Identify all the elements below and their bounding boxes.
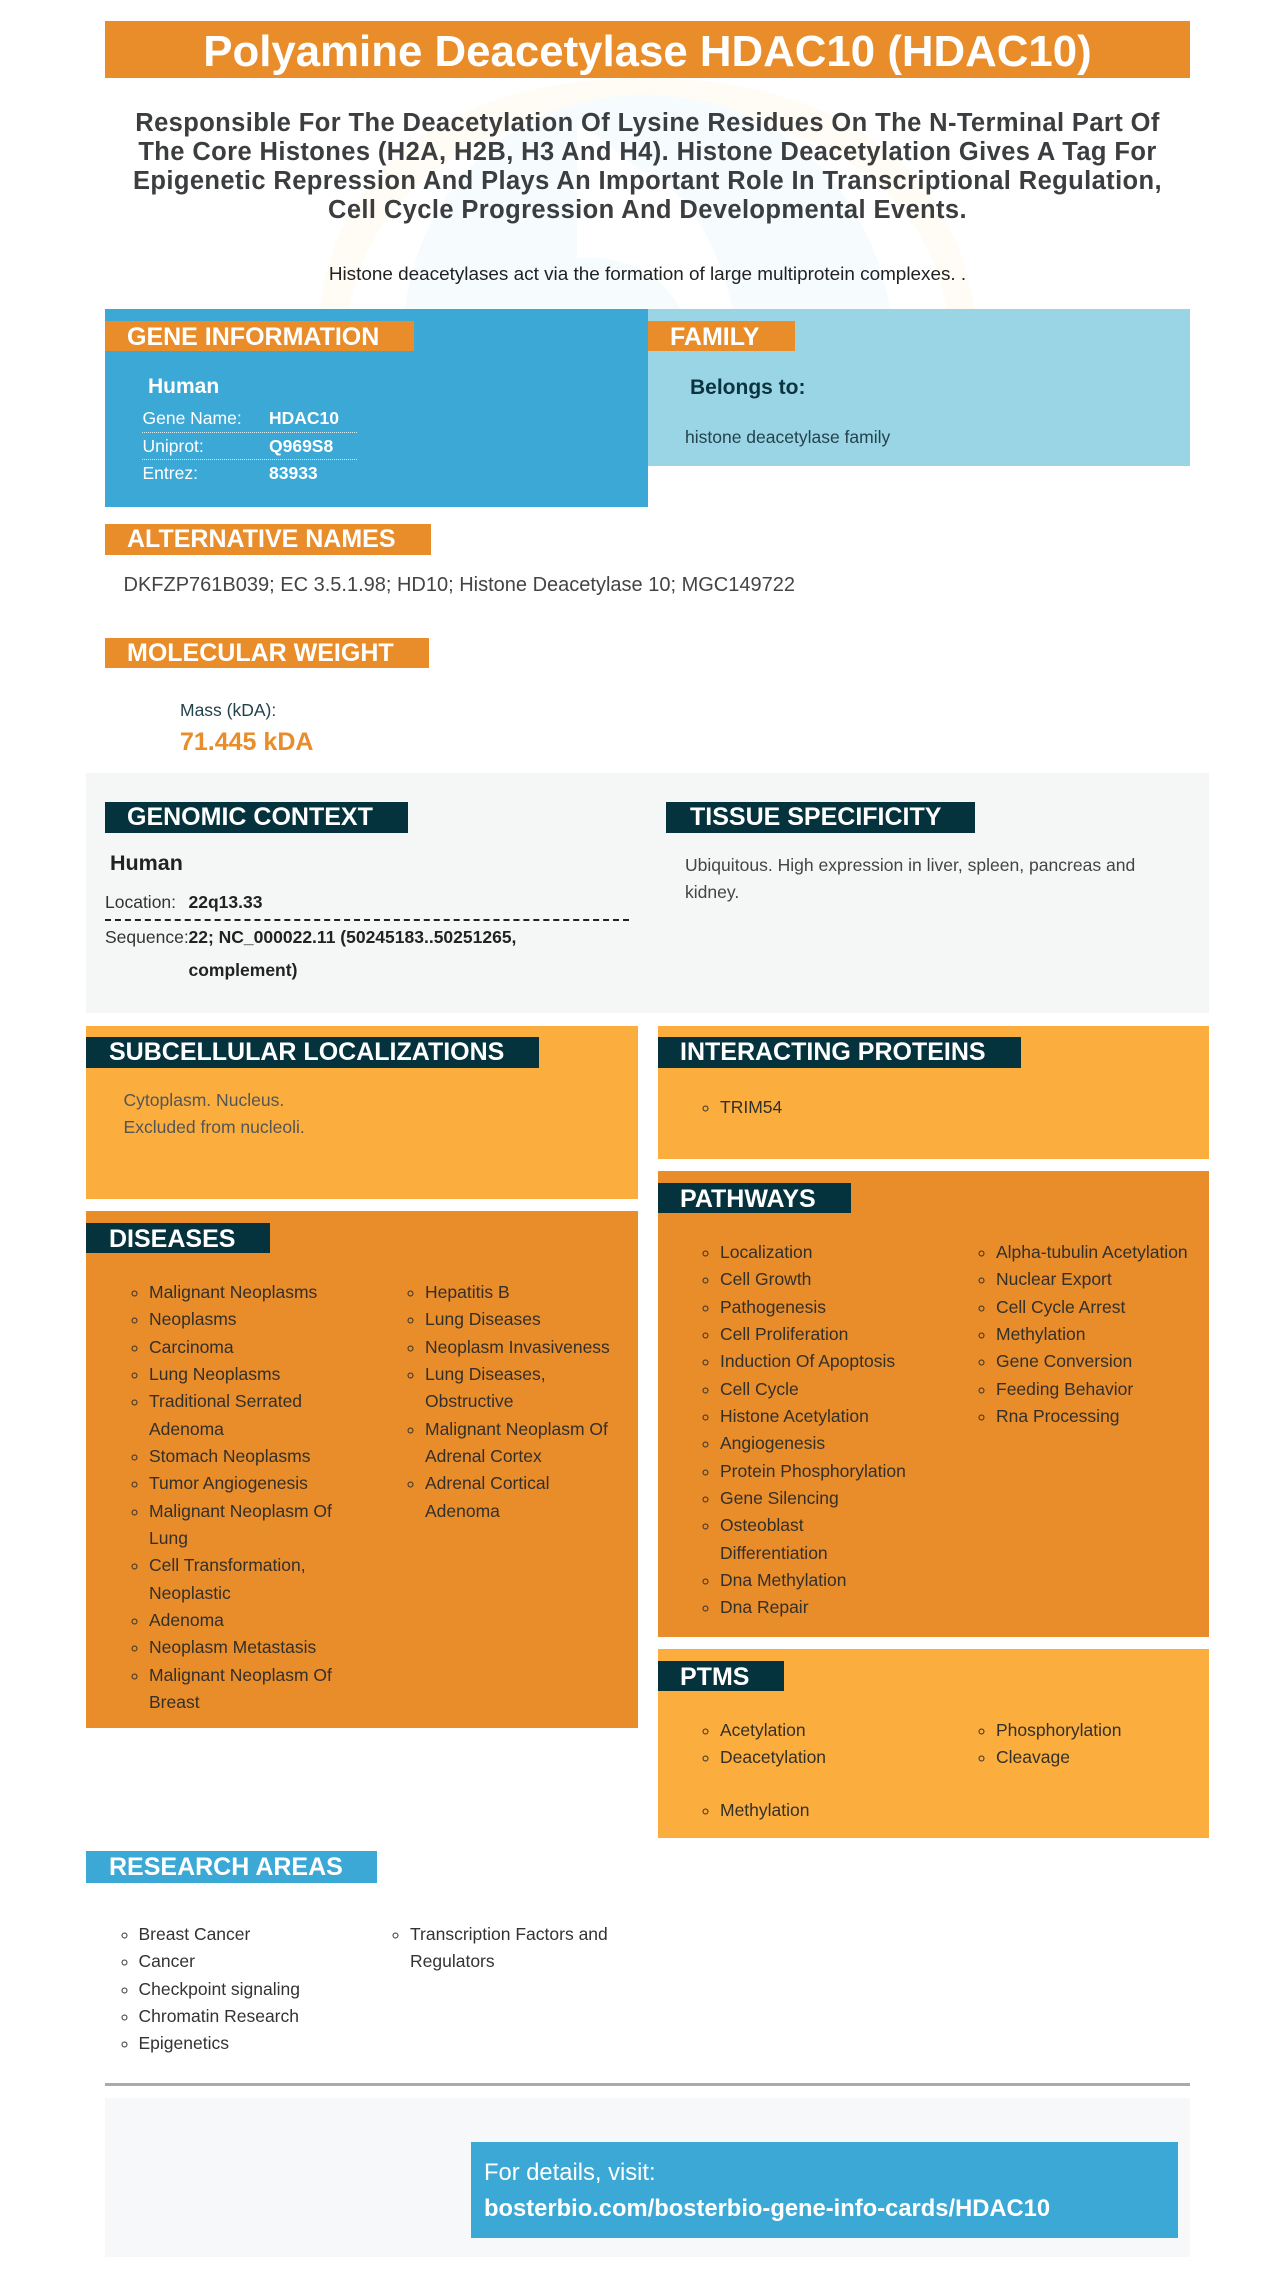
sequence value [188, 927, 516, 980]
pathway list column 1: Induction Of Apoptosis [720, 1351, 895, 1371]
heading: pathways: PATHWAYS [680, 1185, 816, 1213]
pathway list column 1: Angiogenesis [720, 1433, 825, 1453]
pathway list column 2: Feeding Behavior [996, 1379, 1133, 1399]
disease list column 2: Lung Diseases, Obstructive [425, 1364, 546, 1411]
heading: family: FAMILY [670, 323, 759, 351]
gene details table [142, 408, 357, 483]
pathway list column 1: Histone Acetylation [720, 1406, 869, 1426]
localization text [124, 1090, 305, 1137]
gene details table: 83933 [269, 463, 318, 483]
gene details table: HDAC10 [269, 408, 339, 428]
heading: pathways [658, 1183, 851, 1213]
location value: 22q13.33 [188, 892, 262, 912]
mass label: Mass (kDA): [180, 700, 276, 720]
research list column 1 [122, 1924, 300, 2053]
research list column 1: Cancer [138, 1951, 195, 1971]
disease list column 1: Cell Transformation, Neoplastic [149, 1555, 306, 1603]
disease list column 1: Carcinoma [149, 1337, 234, 1357]
belongs to label: Belongs to: [690, 376, 806, 399]
pathway list column 1: Cell Cycle [720, 1379, 799, 1399]
disease list column 2: Malignant Neoplasm Of Adrenal Cortex [425, 1419, 608, 1466]
ptm list column 1: Acetylation [720, 1720, 806, 1740]
pathway list column 1: Protein Phosphorylation [720, 1461, 906, 1481]
disease list column 2 [408, 1282, 610, 1521]
ptm list column 2 [978, 1720, 1122, 1767]
description heading [133, 109, 1162, 224]
disease list column 2: Adrenal Cortical Adenoma [425, 1473, 550, 1521]
panel: subcellular localizations [86, 1026, 638, 1199]
heading: alternative names: ALTERNATIVE NAMES [127, 525, 396, 553]
heading: interacting proteins: INTERACTING PROTEINS [680, 1038, 986, 1066]
pathway list column 1: Pathogenesis [720, 1297, 826, 1317]
pathway list column 1 [702, 1242, 906, 1617]
panel: interacting proteins [658, 1026, 1209, 1159]
heading: gene information: GENE INFORMATION [127, 323, 379, 351]
research list column 1: Epigenetics [138, 2033, 229, 2053]
background watermark [320, 78, 974, 309]
disease list column 1 [132, 1282, 332, 1712]
panel: diseases [86, 1211, 638, 1728]
protein list: TRIM54 [720, 1097, 782, 1117]
pathway list column 1: Dna Repair [720, 1597, 809, 1617]
disease list column 1: Traditional Serrated Adenoma [149, 1391, 302, 1439]
description heading: The Core Histones (H2A, H2B, H3 And H4). Histone Deacetylation Gives A Tag For [138, 138, 1157, 166]
callout: details link [471, 2142, 1178, 2238]
disease list column 1: Lung Neoplasms [149, 1364, 280, 1384]
family name: histone deacetylase family [685, 427, 890, 447]
pathway list column 2: Methylation [996, 1324, 1086, 1344]
details url: bosterbio.com/bosterbio-gene-info-cards/HDAC10 [484, 2195, 1050, 2222]
sequence value: 22; NC_000022.11 (50245183..50251265, [188, 927, 516, 947]
panel: footer [105, 2098, 1190, 2257]
ptm list column 1 [702, 1720, 826, 1820]
localization text: Excluded from nucleoli. [124, 1117, 305, 1137]
research list column 2: Transcription Factors and Regulators [410, 1924, 608, 1971]
disease list column 1: Neoplasm Metastasis [149, 1637, 316, 1657]
heading: research areas: RESEARCH AREAS [109, 1853, 343, 1881]
disease list column 1: Malignant Neoplasm Of Breast [149, 1665, 332, 1712]
panel: genomic context and tissue specificity [86, 773, 1209, 1013]
title banner: Polyamine Deacetylase HDAC10 (HDAC10) [203, 27, 1092, 76]
research list column 1: Checkpoint signaling [138, 1979, 300, 1999]
research list column 1: Chromatin Research [138, 2006, 299, 2026]
panel: family [648, 309, 1190, 466]
heading: subcellular localizations: SUBCELLULAR LOCALIZATIONS [109, 1038, 504, 1066]
alternative names text: DKFZP761B039; EC 3.5.1.98; HD10; Histone Deacetylase 10; MGC149722 [124, 574, 795, 596]
details label: For details, visit: [484, 2159, 656, 2186]
pathway list column 2: Gene Conversion [996, 1351, 1132, 1371]
heading: diseases: DISEASES [109, 1225, 235, 1253]
ptm list column 1: Methylation [720, 1800, 810, 1820]
heading: tissue specificity: TISSUE SPECIFICITY [690, 803, 941, 831]
pathway list column 1: Osteoblast Differentiation [720, 1515, 828, 1563]
pathway list column 2: Cell Cycle Arrest [996, 1297, 1125, 1317]
disease list column 1: Adenoma [149, 1610, 224, 1630]
species label: Human [110, 851, 183, 875]
localization text: Cytoplasm. Nucleus. [124, 1090, 284, 1110]
disease list column 1: Tumor Angiogenesis [149, 1473, 308, 1493]
pathway list column 2: Rna Processing [996, 1406, 1120, 1426]
species label: Human [148, 375, 219, 398]
pathway list column 1: Dna Methylation [720, 1570, 846, 1590]
heading: ptms: PTMS [680, 1663, 749, 1691]
description heading: Cell Cycle Progression And Developmental Events. [328, 196, 967, 224]
gene details table: Entrez: [142, 463, 198, 483]
dashed divider [105, 919, 629, 921]
pathway list column 1: Cell Proliferation [720, 1324, 848, 1344]
heading: diseases [86, 1223, 270, 1253]
pathway list column 2 [978, 1242, 1188, 1426]
sequence label: Sequence: [105, 927, 189, 947]
disease list column 1: Malignant Neoplasms [149, 1282, 317, 1302]
panel: ptms [658, 1649, 1209, 1838]
gene details table: Uniprot: [142, 436, 204, 456]
complex note: Histone deacetylases act via the formation of large multiprotein complexes. . [329, 264, 966, 285]
description heading: Epigenetic Repression And Plays An Important Role In Transcriptional Regulation, [133, 167, 1162, 195]
ptm list column 2: Phosphorylation [996, 1720, 1122, 1740]
disease list column 2: Neoplasm Invasiveness [425, 1337, 610, 1357]
pathway list column 1: Gene Silencing [720, 1488, 839, 1508]
disease list column 2: Lung Diseases [425, 1309, 541, 1329]
location row: Location: [105, 892, 176, 912]
tissue specificity text: kidney. [685, 882, 739, 902]
sequence value: complement) [188, 960, 297, 980]
disease list column 1: Stomach Neoplasms [149, 1446, 310, 1466]
ptm list column 2: Cleavage [996, 1747, 1070, 1767]
panel: gene information [105, 309, 648, 507]
heading: ptms [658, 1661, 784, 1691]
gene details table: Q969S8 [269, 436, 333, 456]
pathway list column 1: Localization [720, 1242, 812, 1262]
disease list column 1: Malignant Neoplasm Of Lung [149, 1501, 332, 1548]
pathway list column 2: Nuclear Export [996, 1269, 1112, 1289]
heading: genomic context: GENOMIC CONTEXT [127, 803, 373, 831]
heading: molecular weight: MOLECULAR WEIGHT [127, 639, 394, 667]
panel: pathways [658, 1171, 1209, 1637]
disease list column 2: Hepatitis B [425, 1282, 510, 1302]
pathway list column 1: Cell Growth [720, 1269, 811, 1289]
gene details table: Gene Name: [142, 408, 242, 428]
disease list column 1: Neoplasms [149, 1309, 237, 1329]
ptm list column 1: Deacetylation [720, 1747, 826, 1767]
tissue specificity text [685, 855, 1135, 902]
description heading: Responsible For The Deacetylation Of Lysine Residues On The N-Terminal Part Of [135, 109, 1160, 137]
pathway list column 2: Alpha-tubulin Acetylation [996, 1242, 1188, 1262]
tissue specificity text: Ubiquitous. High expression in liver, spleen, pancreas and [685, 855, 1135, 875]
heading: family [648, 321, 795, 351]
research list column 1: Breast Cancer [138, 1924, 250, 1944]
mass value: 71.445 kDA [180, 728, 313, 756]
